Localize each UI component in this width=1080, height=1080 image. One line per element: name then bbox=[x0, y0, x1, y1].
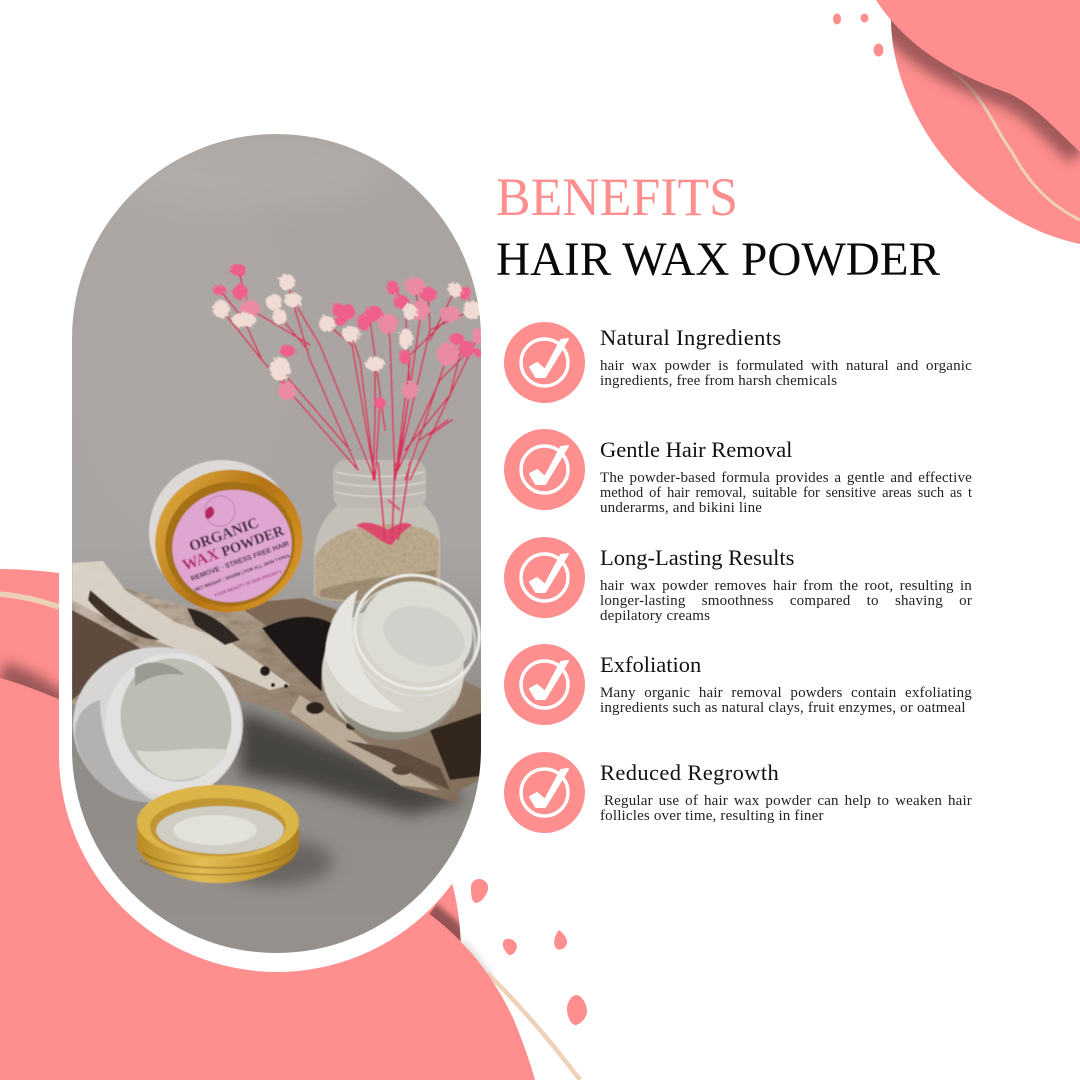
icon: check mark bbox=[504, 322, 585, 403]
text block bbox=[600, 685, 972, 716]
text block: The powder-based formula provides a gentle and effective bbox=[600, 470, 972, 486]
title: BENEFITS bbox=[496, 167, 738, 227]
bottom dots bbox=[471, 879, 587, 1025]
heading: Reduced Regrowth bbox=[600, 760, 779, 785]
title: HAIR WAX POWDER bbox=[496, 233, 940, 286]
text block: ingredients such as natural clays, fruit enzymes, or oatmeal bbox=[600, 700, 966, 716]
text block bbox=[600, 358, 972, 389]
text block: follicles over time, resulting in finer bbox=[600, 808, 824, 824]
icon: check mark bbox=[504, 537, 585, 618]
icon: check mark bbox=[504, 644, 585, 725]
product photo bbox=[60, 120, 495, 965]
text block: Many organic hair removal powders contain exfoliating bbox=[600, 685, 972, 701]
benefit: Exfoliation bbox=[504, 644, 972, 725]
heading: Exfoliation bbox=[600, 652, 701, 677]
text block bbox=[600, 793, 972, 824]
top right dots bbox=[833, 14, 884, 56]
text block: hair wax powder removes hair from the root, resulting in bbox=[600, 578, 972, 594]
open clear jar with powder, right bbox=[321, 572, 481, 740]
text block bbox=[600, 578, 972, 624]
closed jar with gold lid and pink label: WAX POWDER bbox=[180, 522, 287, 575]
benefit: Natural Ingredients bbox=[504, 322, 972, 403]
icon: check mark bbox=[504, 752, 585, 833]
text block: depilatory creams bbox=[600, 608, 710, 624]
heading: Long-Lasting Results bbox=[600, 545, 794, 570]
heading: Gentle Hair Removal bbox=[600, 437, 792, 462]
text block: longer-lasting smoothness compared to shaving or bbox=[600, 593, 972, 609]
benefit: Gentle Hair Removal bbox=[504, 429, 972, 516]
closed jar with gold lid and pink label: YOUR BEAUTY IS OUR PRIORITY bbox=[213, 569, 283, 598]
flower stems bbox=[220, 270, 478, 480]
benefit: Reduced Regrowth bbox=[504, 752, 972, 833]
text block: ingredients, free from harsh chemicals bbox=[600, 373, 837, 389]
closed jar with gold lid and pink label: ORGANIC bbox=[187, 515, 261, 555]
heading: Natural Ingredients bbox=[600, 325, 782, 350]
closed jar with gold lid and pink label: REMOVE · STRESS FREE HAIR bbox=[190, 541, 290, 583]
white capsule frame bbox=[59, 100, 495, 972]
text block: underarms, and bikini line bbox=[600, 500, 762, 516]
floor shadow bbox=[240, 710, 470, 815]
text block: method of hair removal, suitable for sensitive areas such as t bbox=[600, 485, 972, 501]
flower clusters bbox=[213, 264, 484, 409]
text block: hair wax powder is formulated with natural and organic bbox=[600, 358, 972, 374]
closed jar with gold lid and pink label bbox=[148, 460, 304, 613]
open jar with powder, left bbox=[73, 646, 245, 803]
open gold lid bbox=[137, 785, 299, 883]
text block bbox=[600, 470, 972, 516]
sand jar bbox=[314, 460, 440, 603]
bottom left decorative blob bbox=[0, 560, 580, 1080]
title bbox=[496, 167, 940, 286]
benefit: Long-Lasting Results bbox=[504, 537, 972, 624]
top right decorative blob bbox=[876, 0, 1080, 244]
closed jar with gold lid and pink label: NET WEIGHT : 50GRM | FOR ALL SKIN TYPES bbox=[194, 553, 290, 592]
icon: check mark bbox=[504, 429, 585, 510]
driftwood bbox=[72, 561, 490, 803]
text block: Regular use of hair wax powder can help to weaken hair bbox=[604, 793, 972, 809]
